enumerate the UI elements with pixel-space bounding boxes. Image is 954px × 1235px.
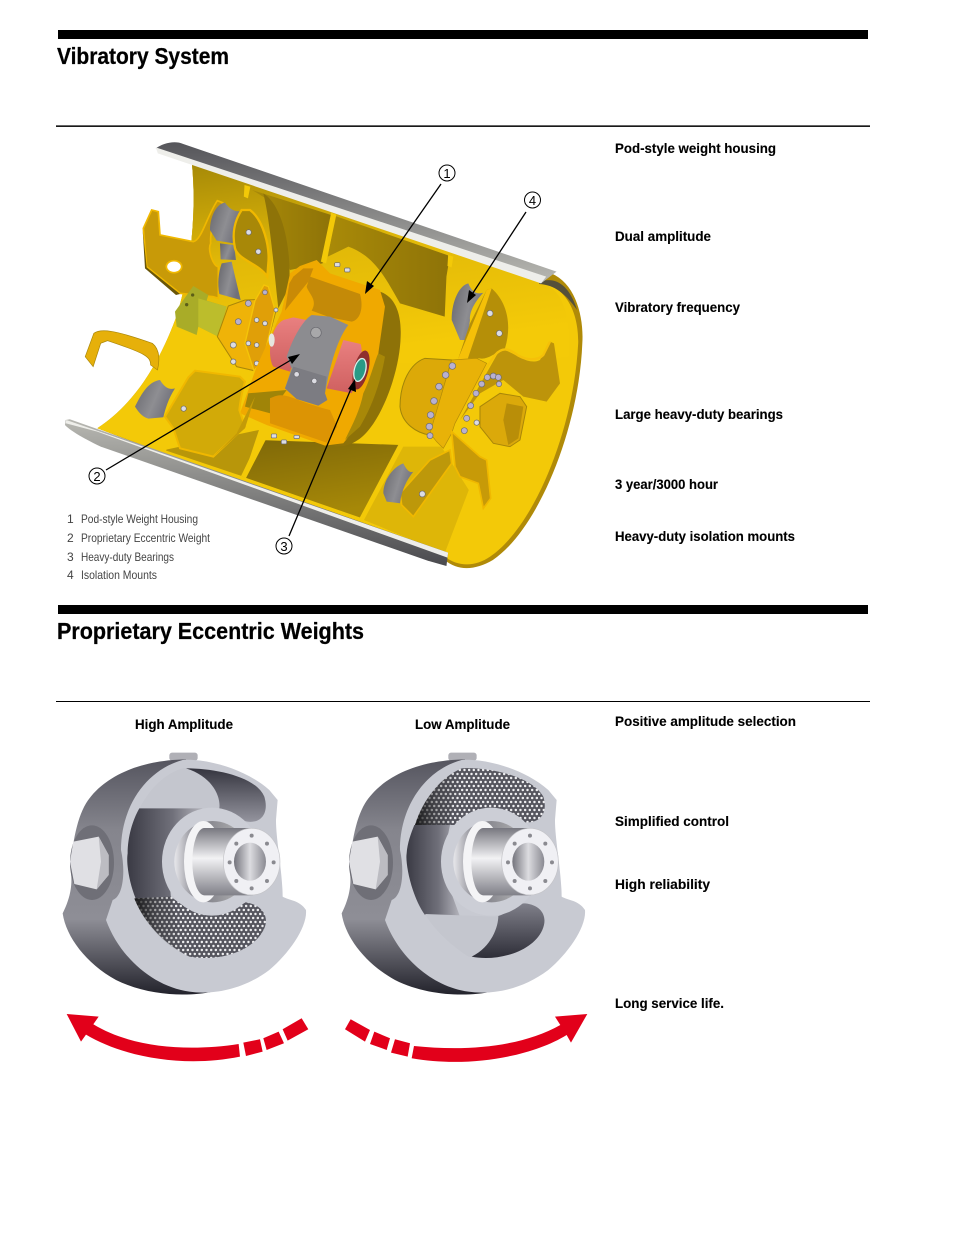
header bar: vibratory system bbox=[58, 30, 868, 39]
right flange bbox=[426, 358, 487, 448]
legend: 1 bbox=[67, 512, 74, 526]
legend bbox=[67, 512, 211, 582]
small bolts on panels bbox=[271, 263, 350, 444]
lower left mount bbox=[135, 380, 175, 419]
feature list: vibratory system bbox=[615, 140, 795, 544]
pod housing bbox=[240, 260, 401, 446]
isolation mounts left top bbox=[210, 203, 242, 300]
leader arrow 3 bbox=[289, 379, 356, 536]
callout 2: 2 bbox=[93, 469, 101, 484]
feature list: eccentric weights: High reliability bbox=[615, 876, 710, 892]
feature list: eccentric weights: Long service life. bbox=[615, 995, 724, 1011]
feature list: eccentric weights bbox=[615, 713, 796, 1011]
callout 4 bbox=[524, 192, 540, 208]
right assembly: hub, flange and mounts bbox=[383, 283, 560, 517]
weight illustration: high amplitude bbox=[63, 753, 306, 995]
legend: Heavy-duty Bearings bbox=[81, 550, 174, 564]
diagram: vibratory drum cutaway bbox=[65, 142, 583, 568]
darker interior panels bbox=[156, 185, 469, 553]
legend: Proprietary Eccentric Weight bbox=[81, 531, 211, 545]
header bar: eccentric weights bbox=[58, 605, 868, 614]
right hub bbox=[400, 358, 452, 435]
feature list: vibratory system: Vibratory frequency bbox=[615, 299, 740, 315]
legend: 2 bbox=[67, 531, 74, 545]
callout 3 bbox=[276, 538, 292, 554]
feature list: vibratory system: 3 year/3000 hour bbox=[615, 476, 719, 492]
gear box bbox=[480, 393, 527, 447]
heading: Low Amplitude: Low Amplitude bbox=[415, 716, 510, 732]
feature list: vibratory system: Dual amplitude bbox=[615, 228, 711, 244]
legend: 3 bbox=[67, 550, 74, 564]
leader arrow 2 bbox=[106, 354, 300, 470]
left hook bracket bbox=[85, 331, 159, 370]
arrow: low amplitude rotation bbox=[345, 1014, 587, 1062]
callout 2 bbox=[89, 468, 105, 484]
callout 1: 1 bbox=[443, 166, 451, 181]
leader arrow 1 bbox=[365, 184, 441, 294]
bolt ring bbox=[461, 373, 502, 434]
left hub and flange bbox=[217, 285, 278, 371]
lower right mount bbox=[383, 463, 413, 503]
drum body bbox=[97, 163, 583, 568]
motor block green bbox=[175, 286, 227, 337]
dark end of the rim opening bbox=[539, 280, 577, 310]
bracket hole bbox=[166, 261, 182, 273]
legend: 4 bbox=[67, 568, 74, 582]
title: Proprietary Eccentric Weights: Proprietary Eccentric Weights bbox=[57, 618, 364, 644]
bearing end bbox=[349, 349, 373, 391]
feature list: vibratory system: Heavy-duty isolation mounts bbox=[615, 528, 795, 544]
right bracket bbox=[452, 342, 560, 428]
wide dark arc behind left plate bbox=[263, 193, 290, 308]
lower right plate bbox=[400, 450, 452, 517]
leader arrow 4 bbox=[467, 212, 526, 303]
feature list: vibratory system: Pod-style weight housing bbox=[615, 140, 776, 156]
bearing block bbox=[285, 315, 348, 406]
feature list: vibratory system: Large heavy-duty bearings bbox=[615, 406, 783, 422]
eccentric weight rollers bbox=[270, 317, 362, 393]
feature list: eccentric weights: Simplified control bbox=[615, 813, 729, 829]
callout 3: 3 bbox=[280, 539, 288, 554]
callout 1 bbox=[439, 165, 455, 181]
arrow: high amplitude rotation bbox=[67, 1014, 308, 1061]
top left bracket bbox=[143, 201, 223, 298]
drum rims bbox=[65, 142, 557, 566]
upper right mount bbox=[452, 283, 483, 340]
weight illustration: low amplitude bbox=[342, 753, 585, 995]
upper wall shading bbox=[176, 163, 569, 363]
stud bbox=[269, 333, 275, 347]
title: Vibratory System: Vibratory System bbox=[57, 43, 229, 69]
lower left plate bbox=[165, 371, 245, 457]
upper right plate bbox=[458, 288, 508, 360]
left disc plate bbox=[234, 210, 269, 277]
drum shell bbox=[85, 163, 583, 568]
legend: Isolation Mounts bbox=[81, 568, 157, 582]
left assembly: mounts, pod and bearing bbox=[135, 193, 401, 457]
legend: Pod-style Weight Housing bbox=[81, 512, 198, 526]
top rim bbox=[156, 142, 557, 283]
callout 4: 4 bbox=[529, 193, 536, 208]
feature list: eccentric weights: Positive amplitude selection bbox=[615, 713, 796, 729]
lower bracket bbox=[452, 432, 491, 508]
heading: High Amplitude: High Amplitude bbox=[135, 716, 233, 732]
bottom rim bbox=[65, 419, 448, 566]
